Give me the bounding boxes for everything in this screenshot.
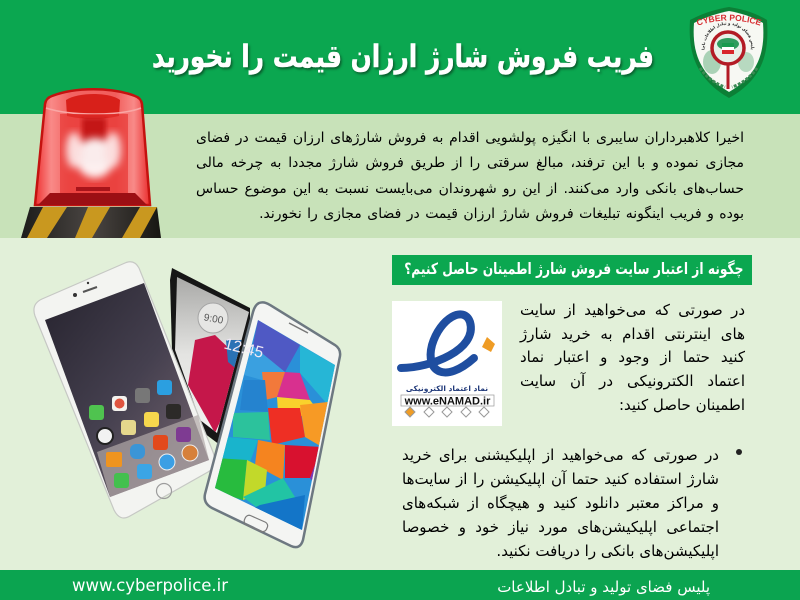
paragraph: website trust seal: های اینترنتی اقدام به خرید شارژ: [520, 325, 745, 343]
icon: cyber police shield logo: [690, 7, 768, 98]
intro paragraph: مجازی نموده و با این ترفند، مبالغ سرقتی را از طریق فروش شارژ مجددا به چرخه مالی: [196, 155, 744, 171]
intro paragraph: بوده و فریب اینگونه تبلیغات فروش شارژ ارزان قیمت در فضای مجازی را نخورند.: [259, 206, 744, 222]
icon: iPhone: [34, 262, 215, 518]
paragraph: website trust seal: کنید حتما از وجود و اعتبار نماد: [520, 348, 745, 366]
icon: cyber police shield logo: پلیس فضای تولید و تبادل اطلاعات ناجا: [702, 22, 754, 50]
lower panel: [0, 238, 800, 570]
intro paragraph: اخیرا کلاهبرداران سایبری با انگیزه پولشویی اقدام به فروش شارژهای ارزان قیمت در فضای: [196, 130, 744, 146]
icon: eNamad badge: نماد اعتماد الکترونیکی: [406, 384, 488, 393]
paragraph: apps advice: [402, 446, 719, 560]
paragraph: website trust seal: اعتماد الکترونیکی در آن سایت: [520, 372, 745, 390]
footer band: [0, 570, 800, 600]
paragraph: website trust seal: اطمینان حاصل کنید:: [619, 396, 745, 414]
section heading: چگونه از اعتبار سایت فروش شارژ اطمینان حاصل کنیم؟: [404, 260, 743, 278]
section heading: [392, 255, 752, 285]
header band: [0, 0, 800, 114]
footer website url: www.cyberpolice.ir: [72, 576, 228, 595]
intro band: [0, 114, 800, 238]
icon: Samsung phone: [200, 300, 350, 547]
title: فریب فروش شارژ ارزان قیمت را نخورید: [152, 39, 654, 75]
icon: LG phone: [170, 268, 250, 445]
paragraph: apps advice: و مراکز معتبر دانلود کنید و هیچگاه از شبکه‌های: [402, 494, 719, 512]
paragraph: apps advice: اجتماعی اپلیکیشن‌های مورد نیاز خود و خصوصا: [402, 518, 719, 536]
icon: eNamad badge: [392, 301, 502, 426]
paragraph: apps advice: شارژ استفاده کنید حتما آن اپلیکیشن را از سایت‌ها: [402, 470, 719, 488]
bullet dot: [736, 449, 742, 455]
paragraph: apps advice: در صورتی که می‌خواهید از اپلیکیشنی برای خرید: [402, 446, 719, 464]
icon: Samsung phone: 12:45: [222, 336, 265, 362]
icon: eNamad badge: www.eNAMAD.ir: [404, 396, 491, 408]
intro paragraph: [196, 130, 744, 222]
footer organisation name: پلیس فضای تولید و تبادل اطلاعات: [497, 578, 710, 596]
paragraph: website trust seal: [519, 301, 745, 414]
intro paragraph: حساب‌های بانکی وارد می‌کنند. از این رو شهروندان می‌بایست نسبت به این موضوع حساس: [196, 181, 744, 197]
paragraph: apps advice: اپلیکیشن‌های بانکی را دریافت نکنید.: [496, 542, 719, 560]
icon: red siren: [21, 89, 161, 238]
paragraph: website trust seal: در صورتی که می‌خواهید از سایت: [520, 301, 745, 319]
icon: cyber police shield logo: CYBER POLICE: [696, 14, 762, 26]
icon: LG phone: 9:00: [203, 312, 224, 327]
